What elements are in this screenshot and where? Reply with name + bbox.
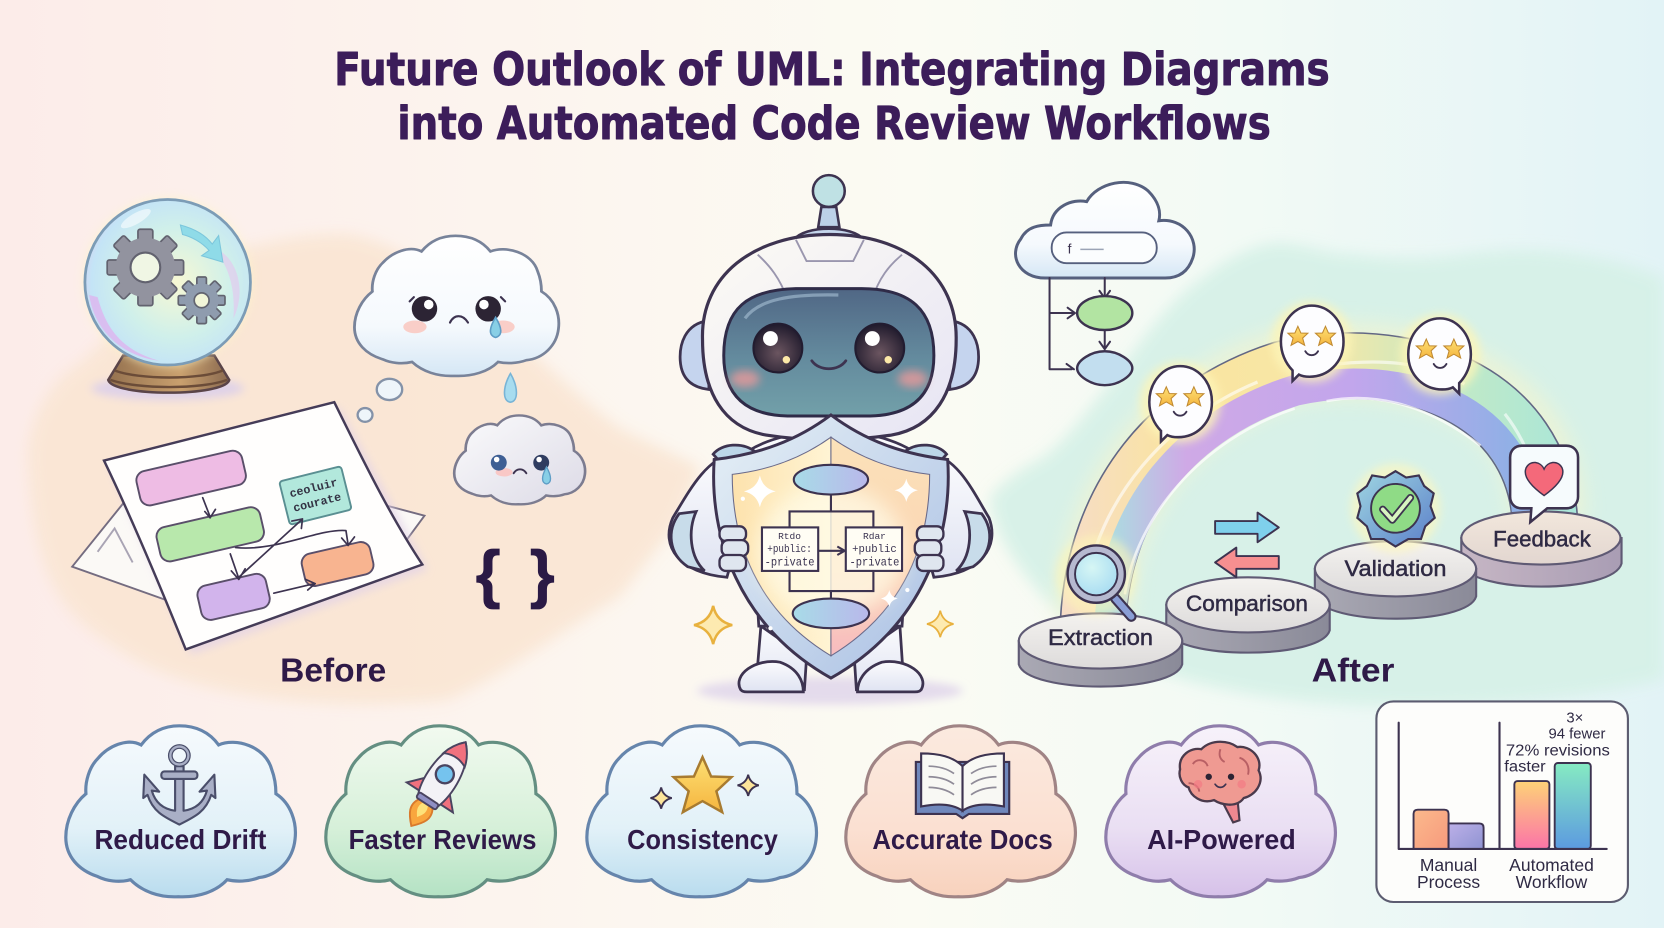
platform: Comparison [1166, 577, 1330, 653]
chart annotations: 3× [1566, 711, 1583, 727]
platform: Feedback [1461, 511, 1622, 587]
icon: small gear [178, 277, 225, 324]
note: teal: courate [292, 490, 343, 516]
title [334, 43, 1330, 150]
box: green [155, 505, 266, 563]
box: orange [300, 540, 375, 588]
label: Before: Before [280, 651, 386, 688]
platform: Comparison: Comparison [1186, 591, 1308, 616]
star-eyed bubble 2 [1271, 301, 1352, 382]
robot blush and smile [730, 361, 928, 387]
star-eyed bubble 3 [1400, 314, 1480, 395]
robot mascot [669, 175, 992, 705]
benefit: AI-Powered [1106, 726, 1335, 897]
robot helmet [702, 235, 956, 440]
chart annotations: 72% revisions [1506, 743, 1610, 760]
icon: falling tear drop [504, 374, 516, 402]
curly braces: { [476, 538, 501, 609]
box: purple [196, 572, 272, 622]
shield diagram: -private [765, 556, 814, 570]
shield diagram: -private [850, 556, 899, 570]
icon: rocket [388, 727, 489, 841]
robot arms [669, 445, 992, 577]
curly braces [476, 538, 555, 609]
chart axis labels: Process [1417, 872, 1480, 892]
benefit: Accurate Docs: Accurate Docs [872, 824, 1053, 855]
robot hands [720, 526, 943, 571]
icon: small sad cloud [454, 415, 585, 504]
benefit: Faster Reviews: Faster Reviews [349, 824, 536, 855]
note: teal [279, 466, 352, 525]
chart axis labels [1417, 855, 1594, 892]
icon: cyan curved arrow [180, 225, 223, 262]
robot eyes [753, 324, 904, 372]
platform: Extraction: Extraction [1048, 625, 1153, 650]
icon: open book [916, 753, 1009, 818]
platform: Validation: Validation [1345, 556, 1446, 581]
shield sparkles [741, 475, 918, 630]
shield diagram: +public [852, 544, 897, 556]
chart annotations: faster [1504, 758, 1546, 775]
icon: crystal ball with gears [83, 197, 253, 400]
benefit: Faster Reviews [326, 726, 555, 897]
benefit: Accurate Docs [846, 726, 1075, 897]
robot ears [680, 320, 979, 389]
chart annotations: 94 fewer [1549, 727, 1606, 743]
robot torso [748, 431, 913, 626]
icon: validation badge [1351, 464, 1440, 553]
robot legs and feet [739, 626, 923, 692]
bar chart panel [1376, 701, 1628, 902]
robot antenna [794, 175, 864, 240]
icon: star with sparkles [651, 757, 759, 812]
star-eyed bubble 1 [1140, 362, 1220, 443]
robot visor [724, 289, 934, 416]
icon: comparison arrows [1215, 513, 1279, 577]
benefit: Reduced Drift: Reduced Drift [94, 824, 266, 855]
icon: large gear [107, 229, 184, 306]
shield [714, 415, 948, 678]
bars: automated workflow [1514, 763, 1591, 849]
curly braces: } [530, 538, 555, 609]
shield diagram: Rtdo [778, 531, 801, 542]
pill: f [1068, 242, 1072, 257]
chart axis labels: Manual [1420, 855, 1477, 875]
benefit: Consistency [587, 726, 816, 897]
benefit: Consistency: Consistency [627, 824, 778, 855]
shield diagram: +public: [767, 544, 812, 556]
paper diagram [104, 402, 428, 655]
title: Future Outlook of UML: Integrating Diagrams [334, 43, 1330, 96]
bars: manual process [1414, 810, 1484, 849]
platform: Validation [1315, 541, 1476, 619]
pill [1052, 232, 1157, 263]
icon: anchor [143, 747, 215, 825]
icon: magnifying glass [1056, 535, 1137, 617]
chart axis labels: Workflow [1516, 872, 1588, 892]
benefit: AI-Powered: AI-Powered [1147, 824, 1296, 855]
platform: Feedback: Feedback [1493, 527, 1592, 552]
icon: big sad cloud [354, 236, 559, 376]
messy arrows [203, 498, 354, 593]
thought bubbles [358, 379, 402, 422]
benefit: Reduced Drift [66, 726, 295, 897]
box: pink [134, 449, 248, 507]
title: into Automated Code Review Workflows [397, 97, 1271, 150]
icon: heart speech bubble [1510, 446, 1578, 522]
icon: brain [1180, 742, 1261, 822]
rainbow arch [1085, 361, 1547, 621]
chart annotations [1504, 711, 1610, 775]
note: teal: ceoluir [288, 476, 339, 501]
chart axis labels: Automated [1509, 855, 1594, 875]
label: After: After [1312, 651, 1395, 688]
shield diagram [762, 465, 902, 628]
shield diagram: Rdar [863, 531, 886, 542]
cloud flow diagram [1016, 182, 1194, 385]
platform: Extraction [1019, 613, 1182, 687]
back sheets of paper [72, 499, 424, 607]
gold sparkles [694, 606, 954, 644]
